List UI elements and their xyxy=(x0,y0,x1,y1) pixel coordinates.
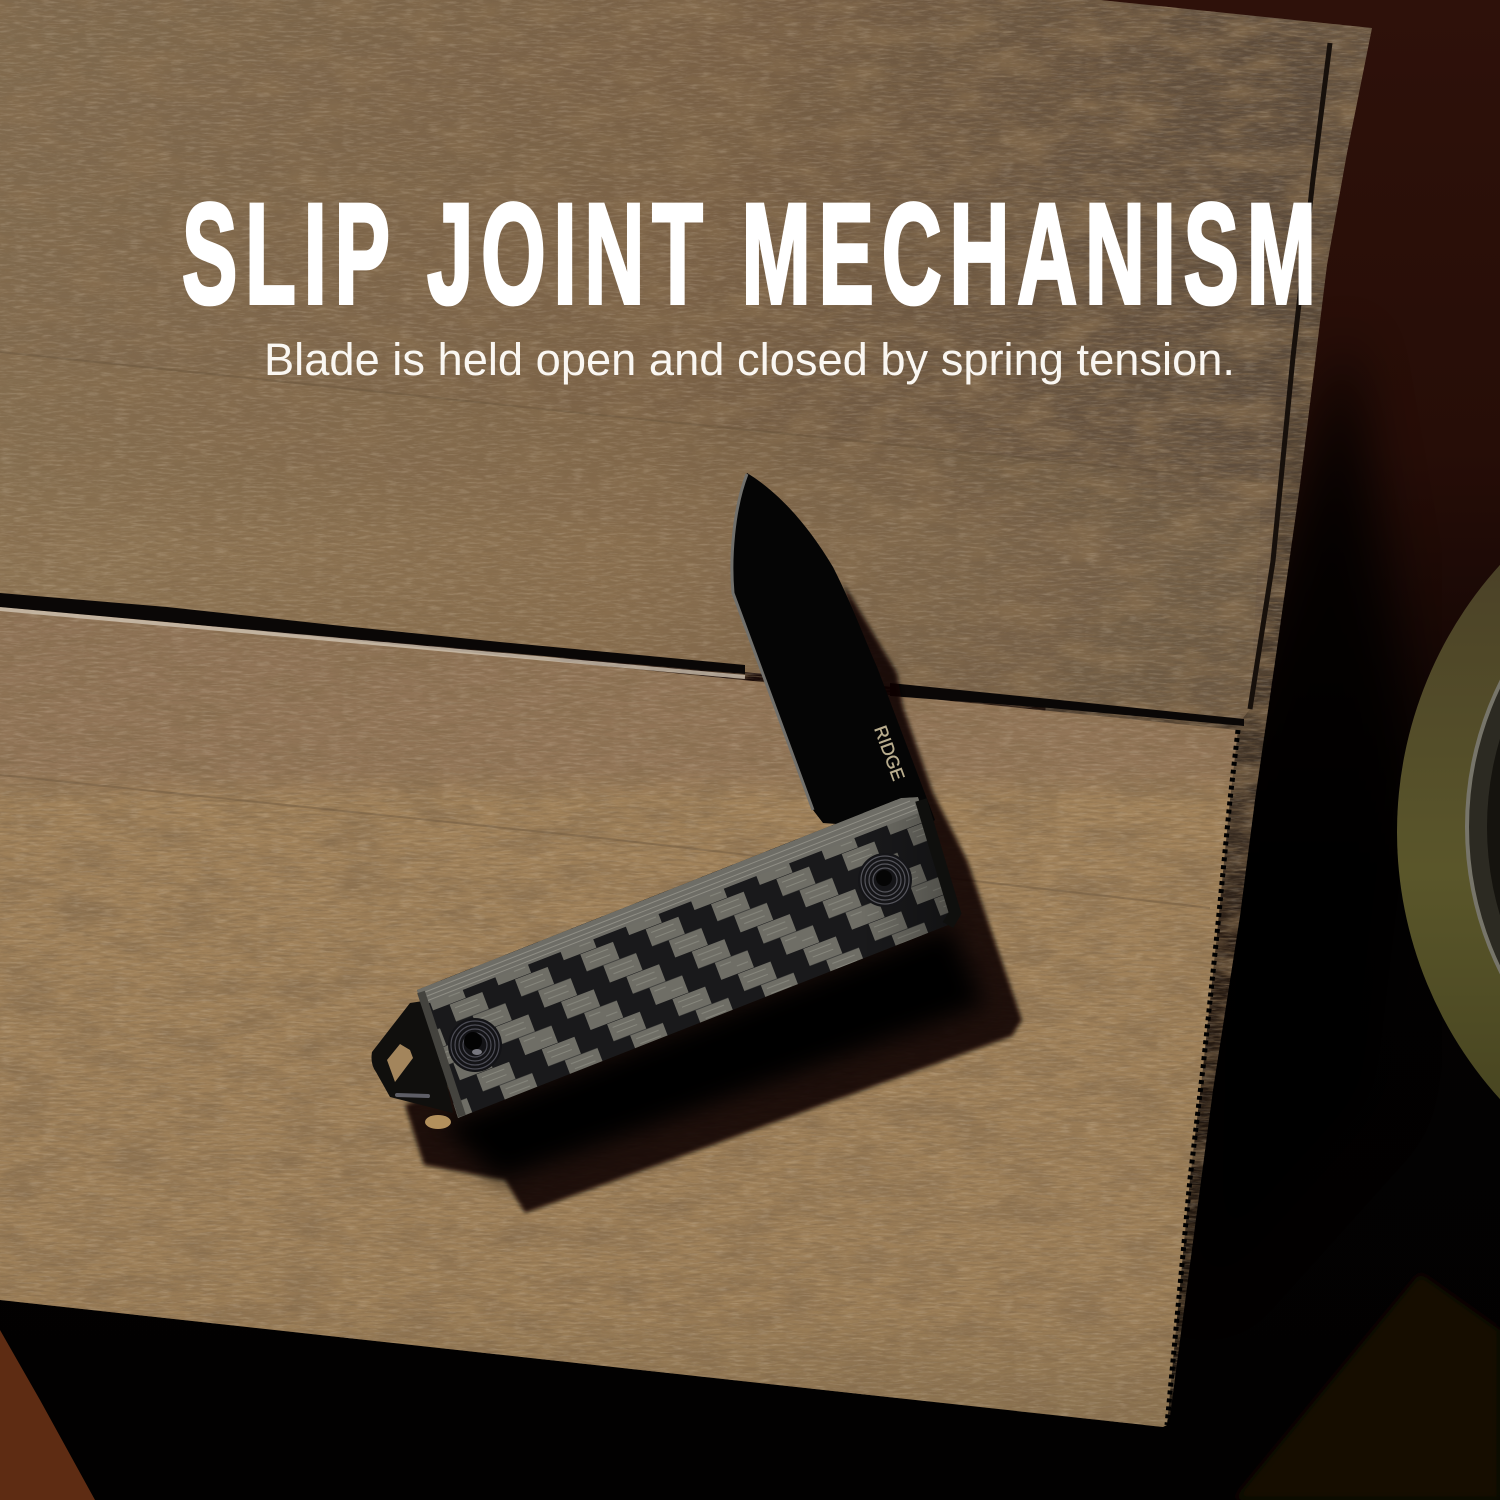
crease line on lower flap xyxy=(0,775,1210,908)
seam between flaps xyxy=(0,593,1244,726)
carbon fibre handle xyxy=(417,797,955,1118)
knife xyxy=(372,473,1022,1213)
shadow beside the box xyxy=(1200,330,1420,1300)
screw near pivot xyxy=(858,853,912,907)
corrugated right edge xyxy=(1167,730,1238,1425)
lower box flap xyxy=(0,605,1238,1427)
fold shading on upper flap xyxy=(0,352,1262,722)
blade xyxy=(732,473,935,830)
subtitle: Blade is held open and closed by spring tension. xyxy=(264,334,1235,385)
screw near lanyard xyxy=(448,1018,502,1072)
title: SLIP JOINT MECHANISM xyxy=(182,173,1316,334)
chamfered top edge xyxy=(417,797,924,1005)
blade engraving: RIDGE: RIDGE xyxy=(870,723,909,783)
lanyard loop xyxy=(372,1000,453,1129)
box side edge strip xyxy=(1000,0,1372,1427)
lit edge of lower flap xyxy=(0,609,745,677)
fold line on upper flap xyxy=(0,352,1262,482)
right end of handle xyxy=(921,800,955,925)
small opening below the loop xyxy=(425,1115,451,1129)
cast shadows xyxy=(405,583,1022,1213)
roll of tape xyxy=(1397,434,1500,1230)
upper box flap xyxy=(0,0,1330,722)
left end of handle xyxy=(421,992,462,1116)
fold crack on right side xyxy=(1250,43,1330,709)
